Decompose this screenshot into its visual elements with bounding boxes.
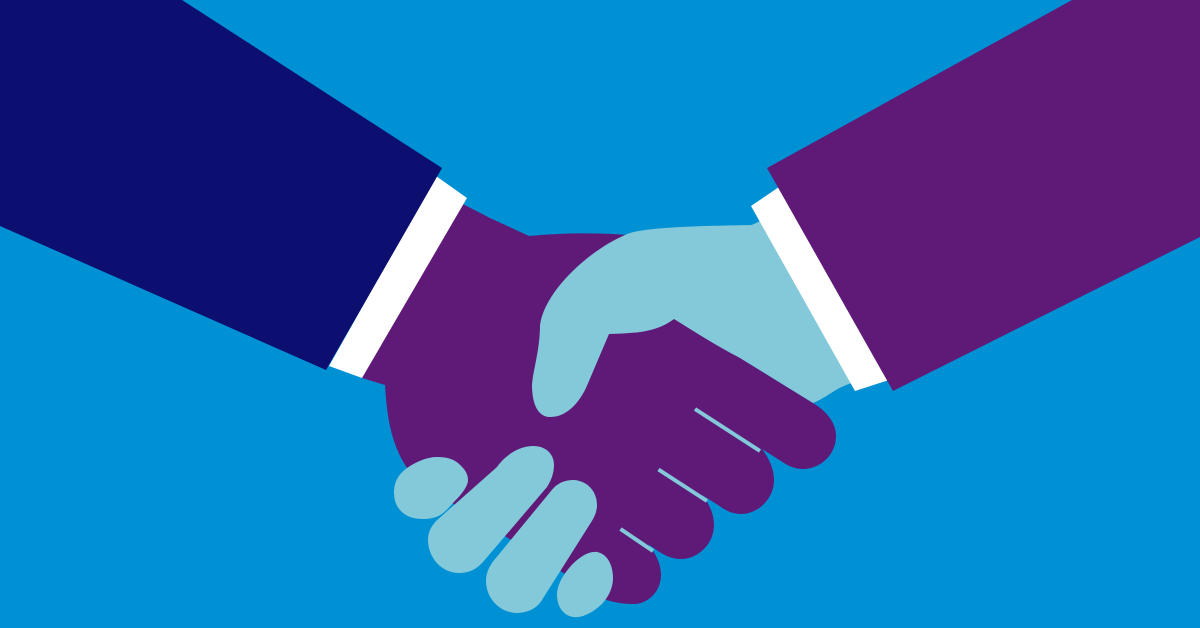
- finger 3: [486, 480, 597, 613]
- left hand: purple: [362, 200, 836, 604]
- right shirt cuff: [751, 187, 889, 391]
- finger 2: [428, 446, 554, 573]
- right sleeve: [767, 0, 1200, 391]
- finger separation lines: [620, 409, 760, 551]
- left shirt cuff: [329, 176, 467, 378]
- fingers of left hand in light blue: [394, 446, 613, 617]
- finger 4: [557, 552, 613, 617]
- finger 1: [394, 457, 468, 519]
- left sleeve: [0, 0, 442, 370]
- right hand: light blue palm and thumb: [532, 219, 852, 417]
